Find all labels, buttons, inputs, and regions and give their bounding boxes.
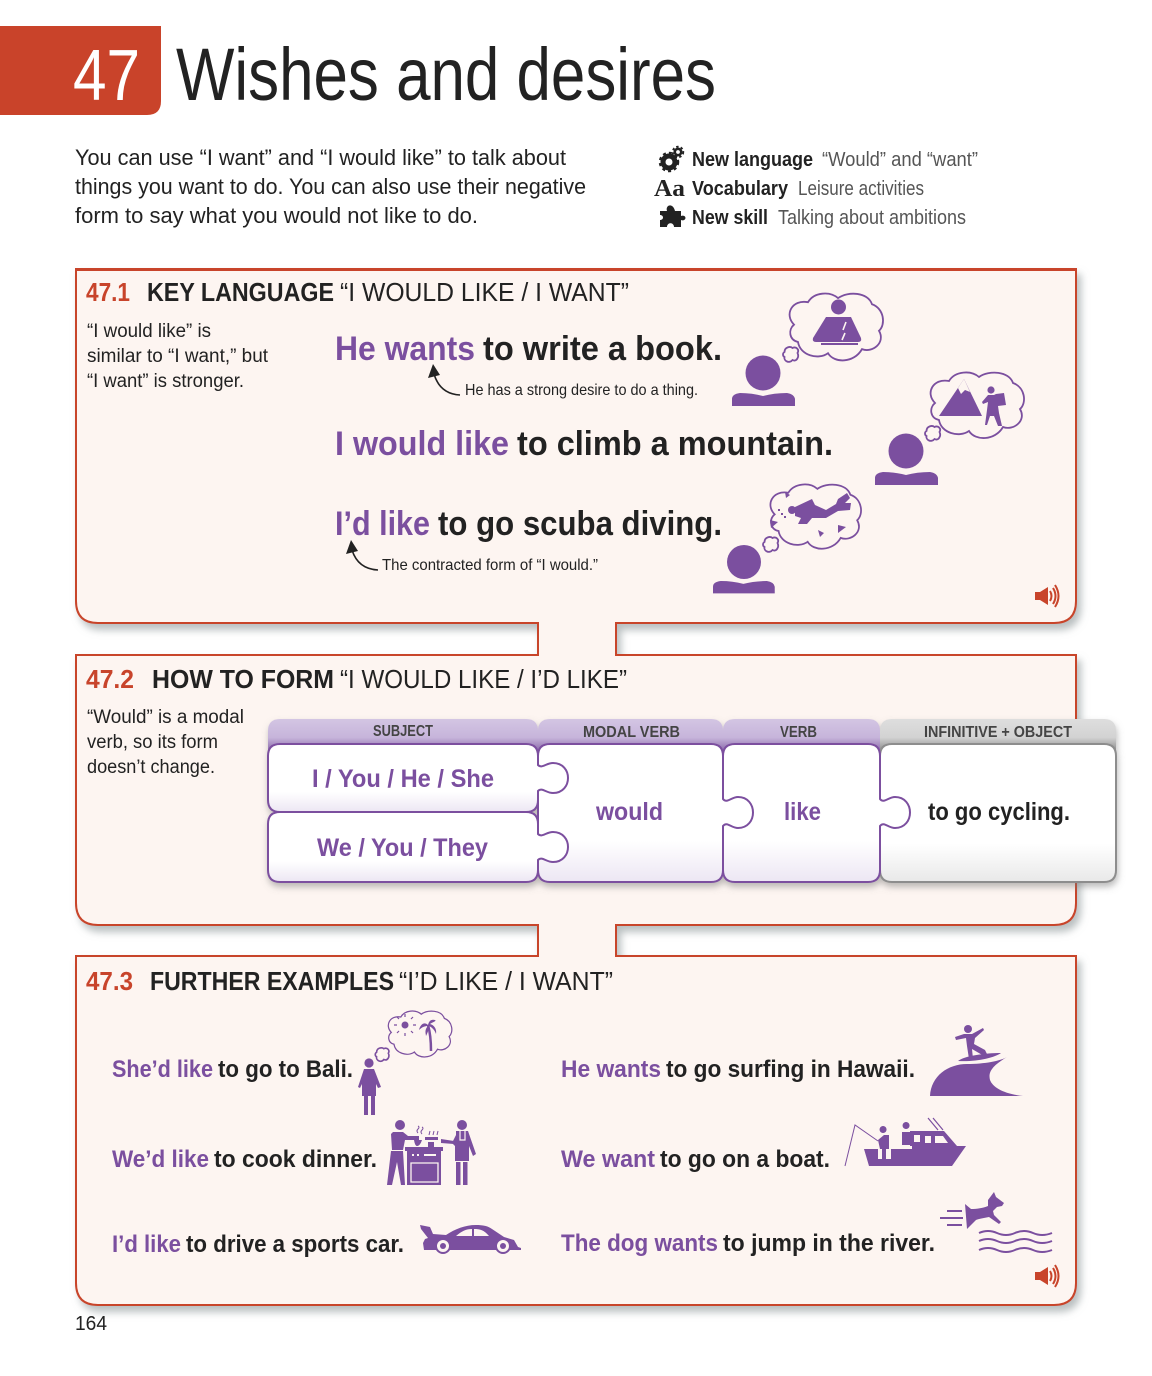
- example sentence: wants: to write a book.: [483, 330, 722, 368]
- icon: person dreaming of scuba diving: [713, 484, 861, 593]
- lesson summary list: Vocabulary: [692, 178, 789, 200]
- page number: 164: [75, 1313, 107, 1335]
- heading 47.2: HOW TO FORM: [152, 664, 334, 694]
- intro paragraph: You can use “I want” and “I would like” to talk about: [75, 145, 566, 170]
- heading 47.3: FURTHER EXAMPLES: [150, 966, 394, 996]
- example sentence: I'd like: I’d like: [335, 505, 430, 543]
- lesson number 47: 47: [73, 36, 140, 116]
- title: Wishes and desires: [176, 33, 716, 116]
- column header: modal verb: [538, 719, 723, 750]
- heading 47.3: “I’D LIKE / I WANT”: [399, 966, 613, 996]
- table labels and words: to go cycling.: [928, 798, 1070, 826]
- example: boat: [561, 1146, 830, 1173]
- table labels and words: VERB: [780, 724, 817, 741]
- heading 47.3: [86, 966, 613, 996]
- example: Bali: [112, 1056, 353, 1083]
- heading 47.1: KEY LANGUAGE: [147, 277, 334, 307]
- heading 47.3: 47.3: [86, 966, 133, 996]
- side note: similar to “I want,” but: [87, 346, 269, 367]
- intro paragraph: things you want to do. You can also use their negative: [75, 174, 586, 199]
- side note: “I would like” is: [87, 321, 211, 342]
- lesson summary list: “Would” and “want”: [822, 149, 978, 171]
- example: Bali: She’d like: [112, 1056, 213, 1083]
- icon: sports car: [420, 1225, 521, 1253]
- table labels and words: would: [595, 798, 663, 826]
- arrow and note: strong desire: He has a strong desire to do a thing.: [465, 382, 698, 399]
- icon: surfer on a wave: [930, 1025, 1023, 1096]
- side note: verb, so its form: [87, 732, 218, 753]
- side note: “I want” is stronger.: [87, 371, 244, 392]
- example: dog: [561, 1230, 935, 1257]
- icon: Aa: Aa: [654, 176, 685, 202]
- icon: couple cooking dinner: [387, 1120, 476, 1185]
- panel top accent: [75, 268, 1077, 271]
- table labels and words: [312, 723, 1072, 862]
- example: sports car: to drive a sports car.: [186, 1231, 404, 1258]
- piece: modal verb with knob: [538, 744, 753, 882]
- example sentence: would like: I would like: [335, 425, 509, 463]
- icon: audio speaker: [1035, 1265, 1058, 1287]
- example sentence: wants: He wants: [335, 330, 475, 368]
- table labels and words: MODAL VERB: [583, 724, 680, 741]
- intro paragraph: form to say what you would not like to do.: [75, 203, 478, 228]
- table labels and words: We / You / They: [317, 834, 488, 862]
- icon: gears: [660, 147, 683, 171]
- icon: woman dreaming of a beach: [358, 1011, 452, 1115]
- example: cook dinner: We’d like: [112, 1146, 209, 1173]
- heading 47.2: 47.2: [86, 664, 134, 694]
- example: boat: to go on a boat.: [660, 1146, 830, 1173]
- example sentence: would like: [335, 425, 833, 463]
- table labels and words: I / You / He / She: [312, 765, 494, 793]
- lesson summary list: [654, 147, 978, 229]
- side note: “Would” is a modal: [87, 707, 244, 728]
- column header: infinitive + object: [880, 719, 1116, 750]
- icon: fishing boat: [845, 1118, 966, 1166]
- side note: [87, 707, 244, 778]
- example: sports car: I’d like: [112, 1231, 181, 1258]
- heading 47.1: [86, 277, 629, 307]
- piece: second subject row with knob: [268, 812, 568, 882]
- column header: verb: [723, 719, 880, 750]
- table labels and words: SUBJECT: [373, 723, 433, 740]
- lesson summary list: New language: [692, 149, 813, 171]
- icon: puzzle piece: [660, 205, 686, 227]
- panel: 47.2 how to form: [86, 664, 1116, 882]
- example: boat: We want: [561, 1146, 655, 1173]
- icon: audio speaker: [1035, 585, 1058, 607]
- sentence building table: [268, 719, 1116, 882]
- side note: [87, 321, 269, 392]
- piece: verb with knob: [723, 744, 910, 882]
- heading 47.1: 47.1: [86, 277, 130, 307]
- lesson summary list: New skill: [692, 207, 768, 229]
- example: dog: to jump in the river.: [723, 1230, 935, 1257]
- heading 47.2: [86, 664, 627, 694]
- intro paragraph: [75, 145, 586, 228]
- example: cook dinner: [112, 1146, 377, 1173]
- example sentence: would like: to climb a mountain.: [517, 425, 833, 463]
- example sentence: I'd like: [335, 505, 722, 543]
- table labels and words: INFINITIVE + OBJECT: [924, 724, 1072, 741]
- side note: doesn’t change.: [87, 757, 215, 778]
- piece: first subject row with knob: [268, 744, 568, 812]
- icon: person dreaming of climbing a mountain: [875, 372, 1024, 485]
- table labels and words: like: [784, 798, 821, 826]
- lesson summary list: Leisure activities: [798, 178, 924, 200]
- heading 47.1: “I WOULD LIKE / I WANT”: [340, 277, 629, 307]
- example: surfing: He wants: [561, 1056, 661, 1083]
- panel: 47.1 key language: [86, 277, 1058, 607]
- example: dog: The dog wants: [561, 1230, 718, 1257]
- icon: dog jumping into river: [940, 1192, 1052, 1252]
- example: Bali: to go to Bali.: [218, 1056, 353, 1083]
- example: surfing: [561, 1056, 915, 1083]
- arrow and note: contracted form: [346, 540, 598, 574]
- panel frame: three connected sections: [76, 269, 1076, 1305]
- example: surfing: to go surfing in Hawaii.: [666, 1056, 915, 1083]
- panel: 47.3 further examples: [86, 966, 1058, 1287]
- column header: subject: [268, 719, 538, 750]
- arrow and note: strong desire: [428, 364, 698, 399]
- example sentence: I'd like: to go scuba diving.: [438, 505, 722, 543]
- header block: lesson number: [0, 26, 161, 116]
- lesson summary list: Talking about ambitions: [778, 207, 966, 229]
- arrow and note: contracted form: The contracted form of “I would.”: [382, 557, 598, 574]
- icon: person dreaming of writing a book: [732, 294, 883, 406]
- piece: infinitive + object: [880, 744, 1116, 882]
- example sentence: wants: [335, 330, 722, 368]
- heading 47.2: “I WOULD LIKE / I’D LIKE”: [340, 664, 627, 694]
- example: cook dinner: to cook dinner.: [214, 1146, 377, 1173]
